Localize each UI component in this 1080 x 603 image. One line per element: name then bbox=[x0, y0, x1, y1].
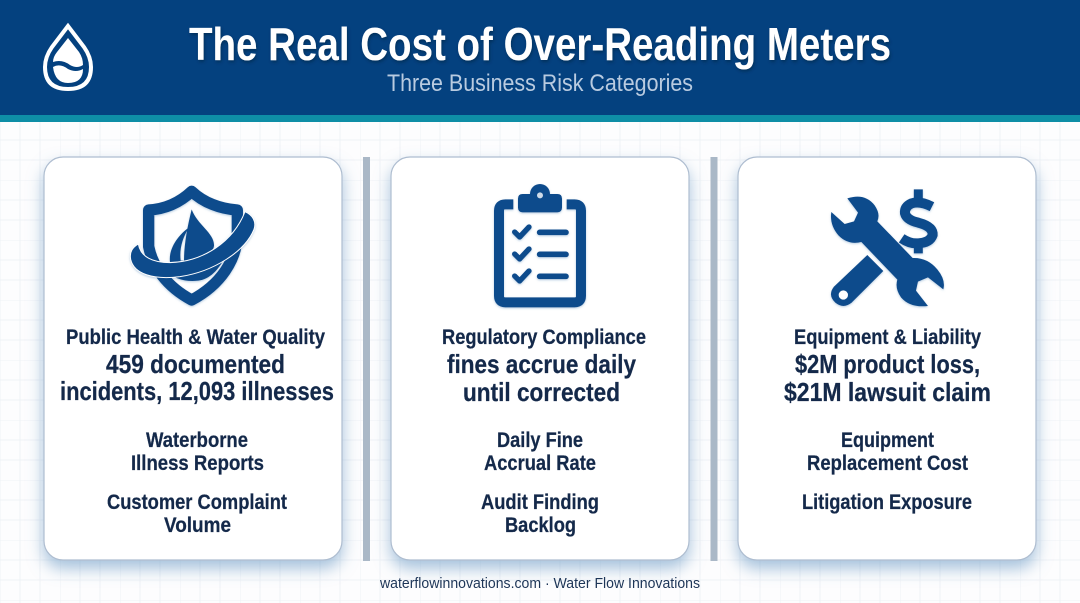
divider: right bbox=[710, 157, 718, 561]
metric: customer complaint volume: Volume bbox=[164, 513, 231, 537]
key statistic: $21M lawsuit claim bbox=[784, 377, 991, 407]
metric: waterborne illness reports: Waterborne bbox=[146, 428, 248, 452]
subtitle: Three Business Risk Categories bbox=[387, 70, 693, 97]
key statistic bbox=[784, 349, 991, 407]
metric: daily fine accrual rate: Daily Fine bbox=[497, 428, 583, 452]
metric: litigation exposure: Litigation Exposure bbox=[802, 490, 972, 514]
footer: waterflowinnovations.com · Water Flow Innovations bbox=[379, 576, 700, 592]
metric: customer complaint volume: Customer Complaint bbox=[107, 490, 287, 514]
metric: audit finding backlog bbox=[481, 490, 599, 537]
title: The Real Cost of Over-Reading Meters bbox=[189, 18, 891, 70]
metric: equipment replacement cost bbox=[807, 428, 968, 475]
header banner bbox=[0, 0, 1080, 122]
metric: waterborne illness reports: Illness Reports bbox=[131, 451, 264, 475]
heading: Public Health & Water Quality bbox=[66, 326, 325, 349]
heading: Equipment & Liability bbox=[794, 326, 981, 349]
key statistic: until corrected bbox=[463, 377, 620, 407]
metric: customer complaint volume bbox=[107, 490, 287, 537]
key statistic: 459 documented bbox=[106, 349, 285, 379]
metric: audit finding backlog: Audit Finding bbox=[481, 490, 599, 514]
key statistic bbox=[60, 349, 334, 406]
key statistic: fines accrue daily bbox=[447, 349, 636, 379]
panel: equipment and liability bbox=[738, 157, 1036, 560]
divider: left bbox=[363, 157, 370, 561]
key statistic bbox=[447, 349, 636, 407]
metric: daily fine accrual rate: Accrual Rate bbox=[484, 451, 596, 475]
icon: shield with water drop bbox=[130, 191, 255, 300]
icon: clipboard checklist bbox=[499, 184, 581, 302]
key statistic: incidents, 12,093 illnesses bbox=[60, 376, 334, 406]
metric: equipment replacement cost: Replacement Cost bbox=[807, 451, 968, 475]
icon: water drop logo bbox=[45, 26, 91, 89]
metric: waterborne illness reports bbox=[131, 428, 264, 475]
panel: regulatory compliance bbox=[391, 157, 689, 560]
icon: wrench and dollar sign bbox=[831, 189, 944, 306]
metric: equipment replacement cost: Equipment bbox=[841, 428, 934, 452]
heading: Regulatory Compliance bbox=[442, 326, 646, 349]
key statistic: $2M product loss, bbox=[795, 349, 980, 379]
panel: public health and water quality bbox=[44, 157, 342, 560]
metric: daily fine accrual rate bbox=[484, 428, 596, 475]
metric: audit finding backlog: Backlog bbox=[505, 513, 576, 537]
